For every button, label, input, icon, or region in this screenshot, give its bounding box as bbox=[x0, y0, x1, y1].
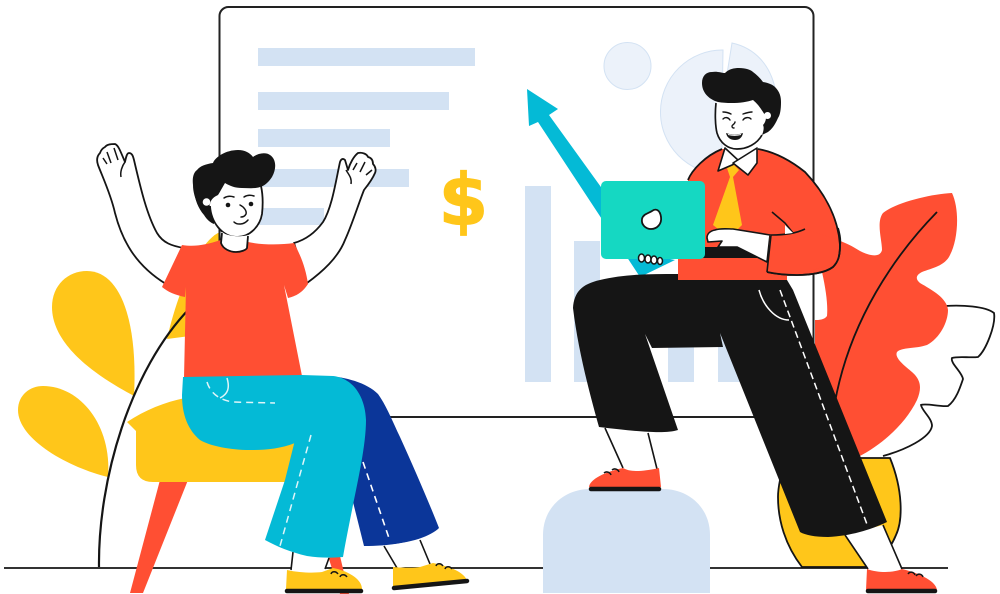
hair bbox=[193, 150, 275, 205]
right hand finger lines bbox=[346, 162, 372, 184]
pants stitching bbox=[207, 378, 311, 546]
right arm bbox=[294, 153, 376, 283]
white leaf outline bbox=[883, 306, 994, 456]
man on the left bbox=[97, 144, 467, 591]
face bbox=[716, 98, 768, 149]
left arm bbox=[97, 144, 184, 284]
forearm and hand bbox=[707, 229, 770, 262]
fingers bbox=[638, 254, 662, 264]
shirt outline bbox=[688, 149, 840, 275]
presentation board bbox=[220, 7, 814, 417]
left shoe bbox=[286, 568, 362, 591]
pie chart bbox=[660, 43, 775, 174]
facial features bbox=[723, 112, 752, 128]
raised shoe bbox=[589, 468, 661, 489]
back leg shin bbox=[384, 540, 430, 568]
chair back leg bbox=[328, 556, 349, 594]
ear bbox=[203, 198, 210, 206]
sleeve cuff patch bbox=[767, 229, 838, 275]
red leaf bbox=[815, 193, 957, 457]
plant pot bbox=[778, 458, 901, 567]
black trousers bbox=[573, 274, 887, 537]
neck bbox=[221, 232, 248, 252]
tie bbox=[713, 165, 742, 229]
left plant bbox=[18, 232, 222, 567]
bar chart bbox=[525, 186, 743, 382]
back leg stitching bbox=[363, 462, 390, 541]
man on the right bbox=[573, 68, 937, 591]
sleeve outline bbox=[767, 228, 840, 275]
chair bbox=[127, 398, 349, 594]
left hand finger lines bbox=[103, 148, 125, 177]
ground shoe bbox=[866, 569, 937, 591]
foot stool bbox=[543, 489, 710, 593]
laughing mouth bbox=[726, 133, 743, 140]
front leg shin bbox=[291, 552, 328, 570]
chair front leg bbox=[130, 480, 188, 593]
large yellow leaf bbox=[52, 271, 135, 396]
face outline bbox=[210, 186, 263, 237]
small yellow leaf bbox=[18, 386, 108, 477]
ear bbox=[764, 112, 771, 119]
cyan front leg bbox=[182, 375, 366, 558]
face outline bbox=[715, 103, 762, 149]
neck bbox=[725, 147, 757, 164]
hair bbox=[702, 68, 781, 135]
collar bbox=[718, 148, 757, 175]
plant stem bbox=[99, 308, 190, 567]
chair seat bbox=[127, 398, 300, 482]
dark waist bbox=[703, 247, 763, 258]
right shoe bbox=[393, 563, 467, 588]
shirt bbox=[162, 240, 308, 378]
neck outline bbox=[221, 233, 248, 252]
face bbox=[210, 186, 263, 237]
red shirt bbox=[678, 149, 840, 281]
hair back bbox=[194, 190, 220, 224]
right plant bbox=[815, 193, 994, 457]
laptop bbox=[601, 181, 705, 264]
growth arrow bbox=[527, 89, 675, 277]
white leaf fill bbox=[850, 306, 994, 456]
small circle bbox=[604, 42, 651, 90]
laptop logo bbox=[642, 210, 661, 229]
navy back leg bbox=[330, 376, 439, 546]
ground line bbox=[4, 567, 948, 569]
yellow leaf behind shirt bbox=[167, 232, 222, 339]
facial features bbox=[224, 195, 254, 224]
trouser stitching bbox=[759, 290, 868, 527]
cuff lines bbox=[767, 212, 805, 272]
text placeholder bars bbox=[258, 48, 475, 225]
board frame bbox=[220, 7, 814, 417]
cuff white patch bbox=[785, 225, 793, 234]
dollar sign: $ bbox=[439, 159, 488, 242]
leaf vein bbox=[835, 212, 937, 402]
shins bbox=[605, 428, 657, 470]
